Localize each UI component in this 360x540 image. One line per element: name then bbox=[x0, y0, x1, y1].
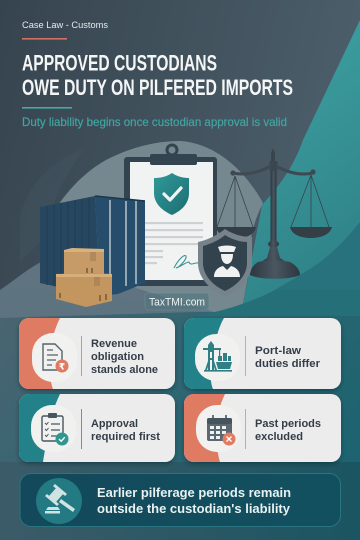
card: Past periods excluded bbox=[184, 394, 341, 462]
text: required first bbox=[91, 431, 160, 443]
illustration: scales of justice bbox=[216, 149, 332, 279]
text bbox=[91, 338, 158, 376]
text bbox=[255, 345, 321, 370]
card: Approval required first bbox=[19, 394, 175, 462]
illustration: shipping container bbox=[40, 196, 145, 296]
watermark: TaxTMI.com: TaxTMI.com bbox=[149, 296, 205, 308]
text bbox=[255, 418, 321, 443]
icon: checklist clipboard bbox=[42, 413, 68, 446]
text bbox=[91, 418, 160, 443]
text: Past periods bbox=[255, 418, 321, 430]
icon: port crane and ship bbox=[203, 341, 232, 372]
footer text: Earlier pilferage periods remain bbox=[97, 485, 291, 500]
title bbox=[22, 50, 293, 100]
text: Port-law bbox=[255, 345, 301, 357]
card: Port-law duties differ bbox=[184, 318, 341, 389]
signature bbox=[174, 256, 205, 268]
text: Approval bbox=[91, 418, 138, 430]
footer text: outside the custodian's liability bbox=[97, 501, 291, 516]
title: APPROVED CUSTODIANS bbox=[22, 50, 217, 76]
footer banner bbox=[20, 474, 340, 526]
watermark: TaxTMI.com bbox=[145, 293, 209, 310]
illustration: officer shield badge bbox=[198, 229, 252, 297]
coral rule bbox=[22, 38, 67, 40]
icon: document with rupee bbox=[43, 344, 68, 372]
footer text bbox=[97, 485, 291, 516]
text: obligation bbox=[91, 351, 144, 363]
text: Revenue bbox=[91, 338, 137, 350]
text: duties differ bbox=[255, 358, 321, 370]
text: excluded bbox=[255, 431, 303, 443]
illustration: cardboard boxes bbox=[56, 248, 112, 307]
text: stands alone bbox=[91, 364, 158, 376]
teal rule bbox=[22, 107, 72, 109]
subtitle: Duty liability begins once custodian approval is valid bbox=[22, 115, 287, 129]
icon: teal shield with check bbox=[154, 173, 189, 215]
icon: gavel bbox=[45, 484, 75, 514]
icon: calendar with cross bbox=[207, 415, 236, 446]
icon: clipboard clasp bbox=[150, 145, 197, 165]
icon: document with rupee: ₹ bbox=[59, 362, 65, 372]
kicker: Case Law - Customs: Case Law - Customs bbox=[22, 20, 108, 31]
icon: officer bbox=[214, 246, 240, 277]
illustration: clipboard with shield bbox=[124, 145, 217, 286]
card: Revenue obligation stands alone bbox=[19, 318, 175, 389]
